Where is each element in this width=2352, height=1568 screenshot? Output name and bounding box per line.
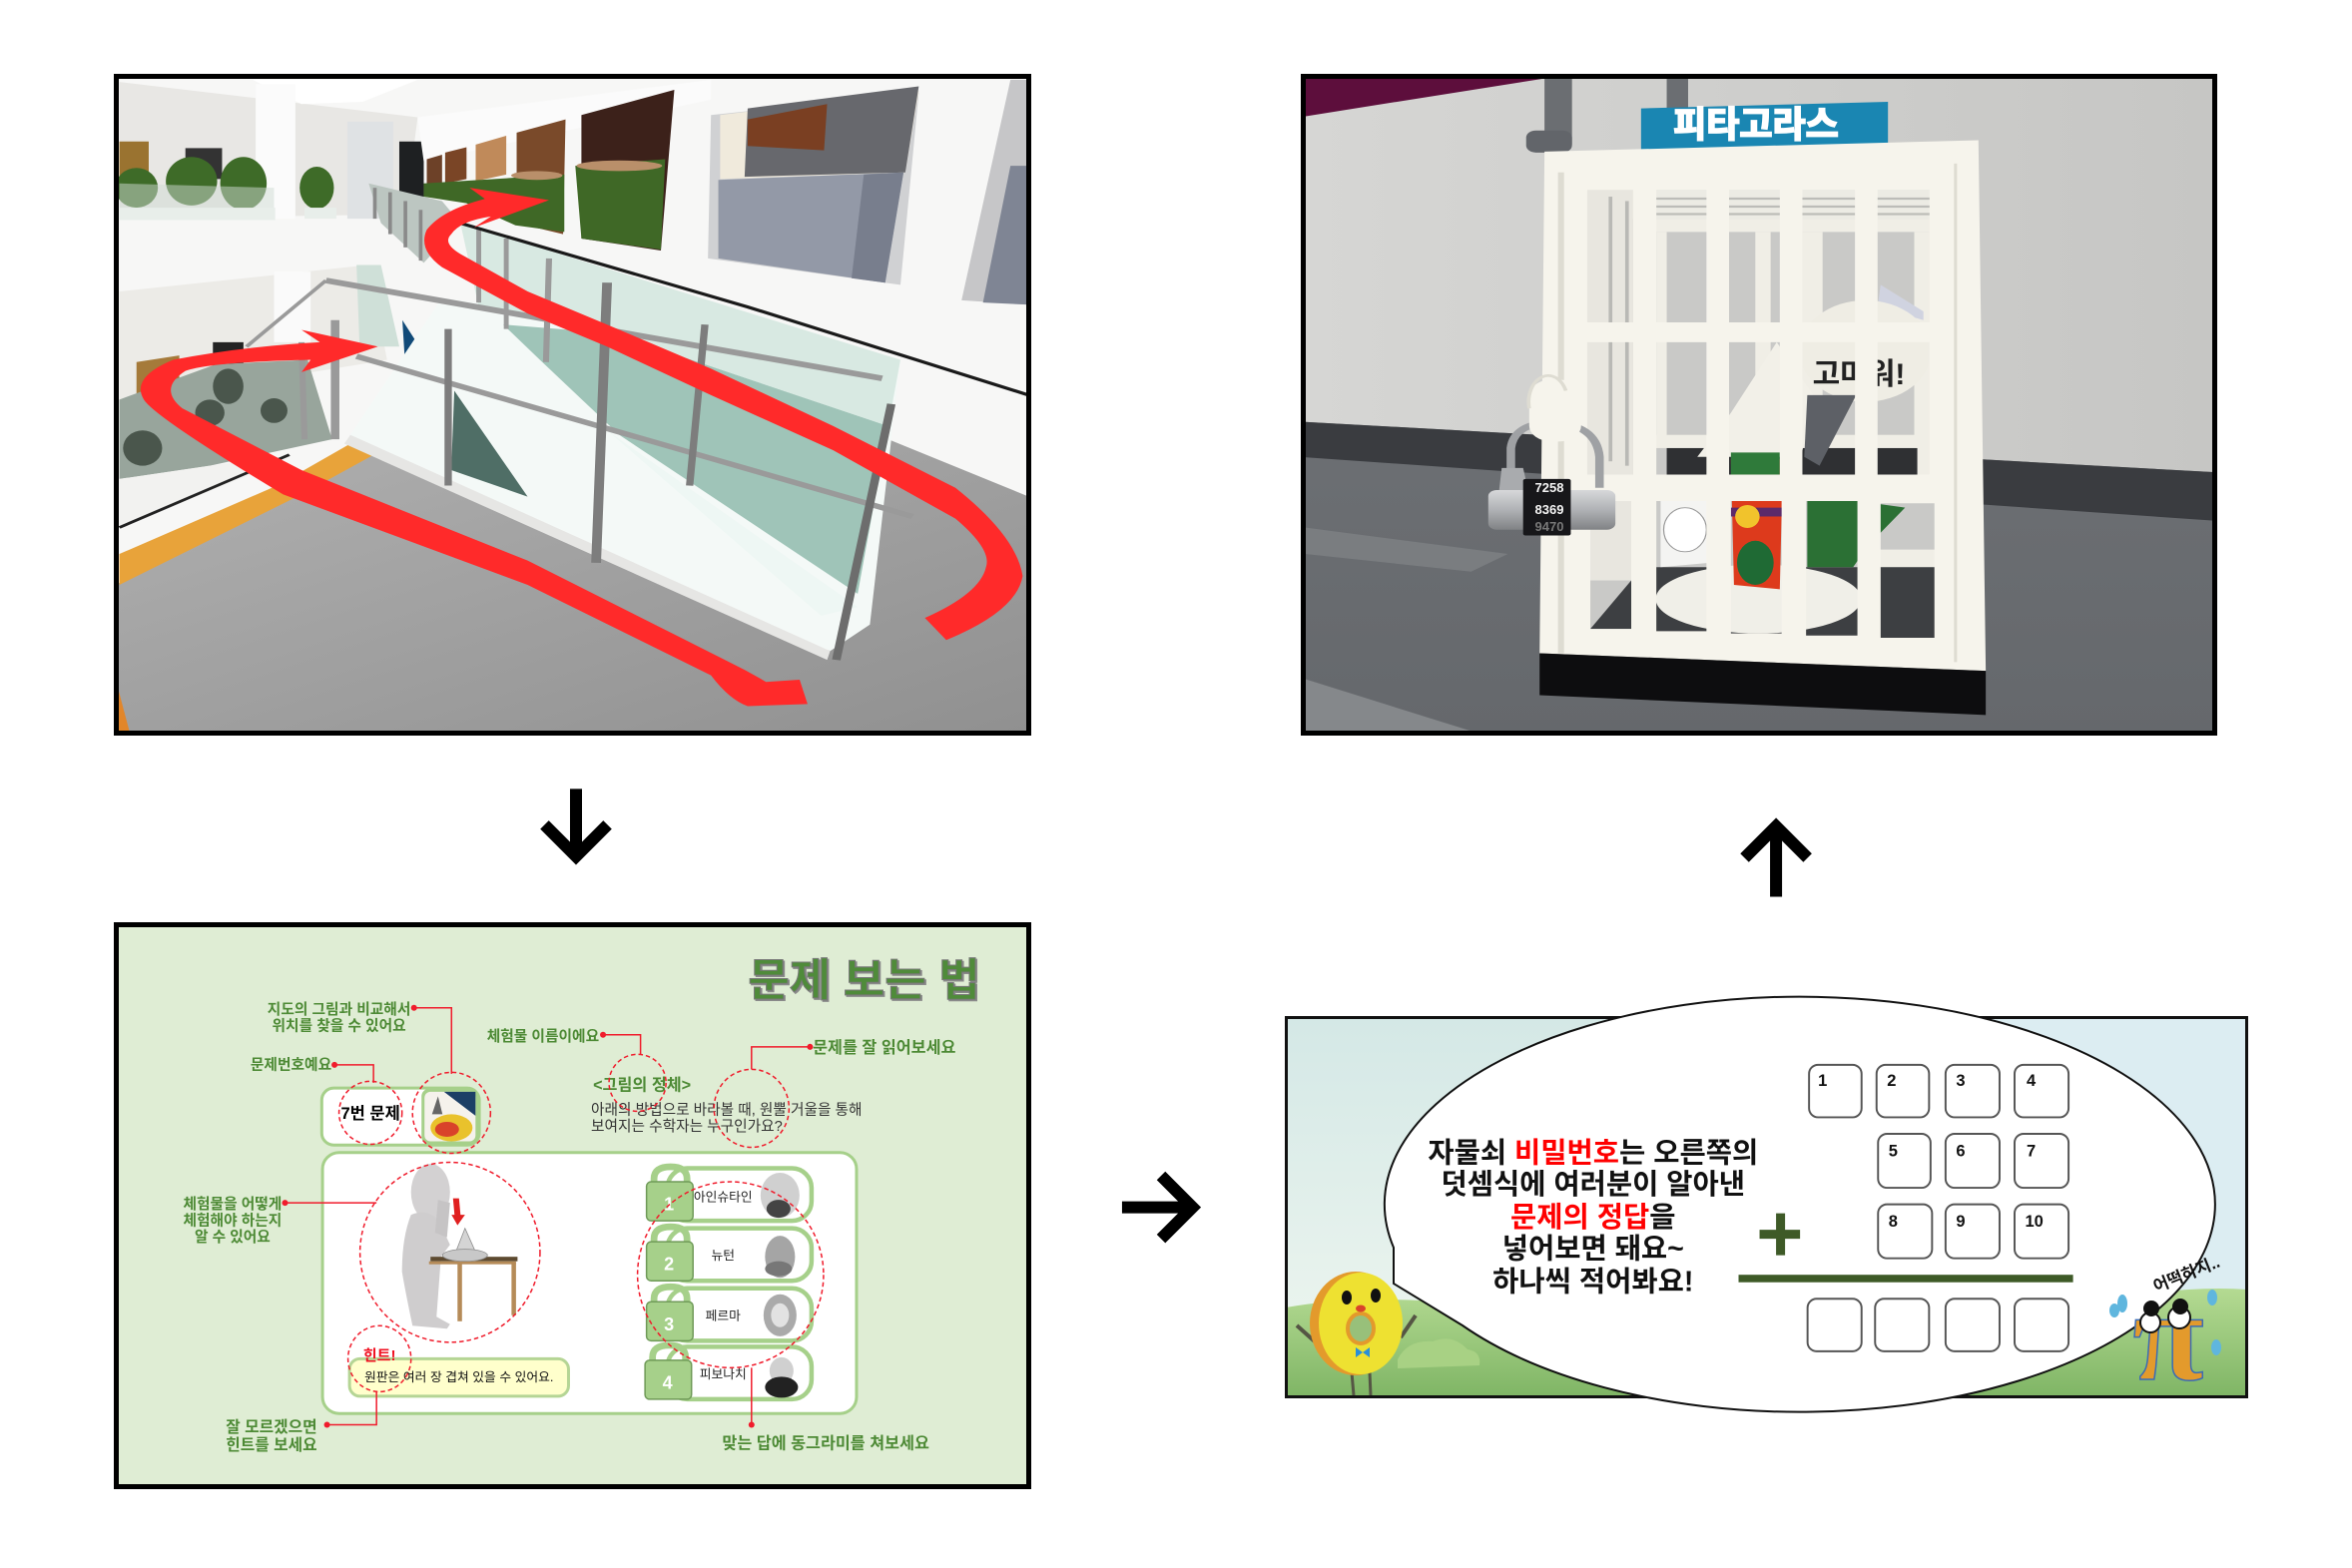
cage interior <box>1590 439 1935 629</box>
green annotation labels: 잘 모르겠으면 <box>226 1418 317 1436</box>
answer option 4: 4 <box>663 1372 673 1392</box>
glass balustrade <box>404 339 891 651</box>
sign text: 피타고라스 <box>1673 104 1839 145</box>
panel: password worksheet <box>1286 997 2247 1412</box>
hint box: 원판은 여러 장 겹쳐 있을 수 있어요. <box>364 1369 553 1384</box>
photo frame <box>116 76 1028 733</box>
green annotation labels: 맞는 답에 동그라미를 쳐보세요 <box>722 1435 929 1453</box>
password instruction text: 하나씩 적어봐요! <box>1492 1267 1693 1299</box>
green annotation labels: 체험해야 하는지 <box>183 1213 282 1230</box>
activity area box <box>322 1153 857 1413</box>
arrow: down to instructions <box>544 788 608 856</box>
question text: <그림의 정체> <box>593 1076 691 1094</box>
box numbers: 2 <box>1887 1071 1896 1090</box>
box numbers: 10 <box>2026 1212 2044 1231</box>
box numbers: 6 <box>1956 1142 1966 1161</box>
box numbers: 9 <box>1956 1212 1966 1231</box>
red leader lines <box>285 1008 810 1424</box>
question text: 보여지는 수학자는 누구인가요? <box>591 1118 783 1135</box>
hint box <box>349 1347 568 1396</box>
green annotation labels: 힌트를 보세요 <box>226 1436 317 1454</box>
panel: combination lock cage photo <box>1300 75 2217 737</box>
green annotation labels: 문제번호예요 <box>251 1056 331 1073</box>
panel: staircase photo with route arrows <box>115 75 1032 737</box>
box numbers: 4 <box>2027 1071 2037 1090</box>
photo frame <box>1304 76 2214 733</box>
box numbers: 7 <box>2027 1142 2036 1161</box>
quiz number box <box>321 1088 479 1145</box>
answer option 2 <box>647 1227 812 1281</box>
green annotation labels: 알 수 있어요 <box>195 1229 271 1246</box>
panel title: 문제 보는 법 <box>748 955 980 1006</box>
green annotation labels: 위치를 찾을 수 있어요 <box>273 1017 406 1034</box>
grass hills <box>1286 1289 2247 1397</box>
plus sign <box>1760 1214 1800 1256</box>
answer option 2: 2 <box>664 1255 674 1275</box>
red route arrows <box>141 330 808 707</box>
planters <box>115 157 333 210</box>
combination lock shackle <box>1510 422 1599 488</box>
character: zero <box>1297 1272 1416 1395</box>
arrow: up to lock photo <box>1745 826 1808 897</box>
panel frame <box>1286 1018 2246 1397</box>
box numbers: 3 <box>1956 1071 1966 1090</box>
lock digits: 8369 <box>1535 502 1563 517</box>
answer option 1 <box>647 1167 812 1221</box>
green annotation labels: 체험물을 어떻게 <box>183 1196 282 1213</box>
green annotation labels: 체험물 이름이에요 <box>487 1028 599 1045</box>
answer option 1: 아인슈타인 <box>694 1190 753 1205</box>
sum line <box>1739 1275 2073 1283</box>
password instruction text: 넣어보면 돼요~ <box>1502 1234 1684 1266</box>
lock digits: 9470 <box>1535 519 1563 534</box>
answer option 3: 3 <box>664 1314 674 1334</box>
panel: how to read the quiz <box>116 924 1028 1487</box>
figure looking at cone mirror <box>402 1164 517 1328</box>
back wall and pillars <box>120 82 417 219</box>
answer option 3 <box>647 1287 812 1340</box>
windows <box>427 155 442 184</box>
ceiling soffit <box>421 142 423 162</box>
green annotation labels: 문제를 잘 읽어보세요 <box>813 1039 956 1057</box>
worried caption: 어떡하지.. <box>2150 1253 2222 1297</box>
box numbers: 5 <box>1889 1142 1898 1161</box>
speech bubble <box>1385 997 2215 1412</box>
lock digits <box>1535 483 1563 531</box>
arrow: right to answer sheet <box>1122 1176 1193 1239</box>
password instruction text: 덧셈식에 여러분이 알아낸 <box>1441 1169 1745 1201</box>
question text: 아래의 방법으로 바라볼 때, 원뿔 거울을 통해 <box>591 1101 863 1118</box>
answer option 4: 피보나치 <box>700 1366 747 1381</box>
lock digits: 7258 <box>1535 480 1563 495</box>
answer option 2: 뉴턴 <box>712 1248 735 1263</box>
hint box: 힌트! <box>363 1347 395 1364</box>
answer option 3: 페르마 <box>706 1307 741 1322</box>
cage frame with bars <box>1539 140 1986 671</box>
password instruction text <box>1428 1138 1758 1299</box>
addition worksheet boxes <box>1808 1065 2068 1351</box>
lower back wall <box>120 265 387 404</box>
answer option 4 <box>645 1345 812 1399</box>
floor <box>115 439 1029 735</box>
password instruction text: 자물쇠 비밀번호는 오른쪽의 <box>1428 1138 1758 1170</box>
password instruction text: 문제의 정답을 <box>1510 1202 1675 1234</box>
question text <box>591 1076 863 1135</box>
green annotation labels <box>183 1001 956 1454</box>
answer option 1: 1 <box>664 1195 674 1215</box>
quiz number box: 7번 문제 <box>340 1104 400 1123</box>
thank you bubble text: 고마워! <box>1813 358 1905 391</box>
dashed red callout circles <box>339 1054 824 1391</box>
distant stair balustrade <box>369 184 451 263</box>
character: pi: π <box>2132 1265 2204 1408</box>
box numbers: 1 <box>1818 1071 1827 1090</box>
green annotation labels: 지도의 그림과 비교해서 <box>268 1001 410 1018</box>
box numbers: 8 <box>1889 1212 1898 1231</box>
character: pi <box>2109 1265 2221 1408</box>
box numbers <box>1818 1071 2044 1231</box>
handrails and posts <box>247 228 912 660</box>
